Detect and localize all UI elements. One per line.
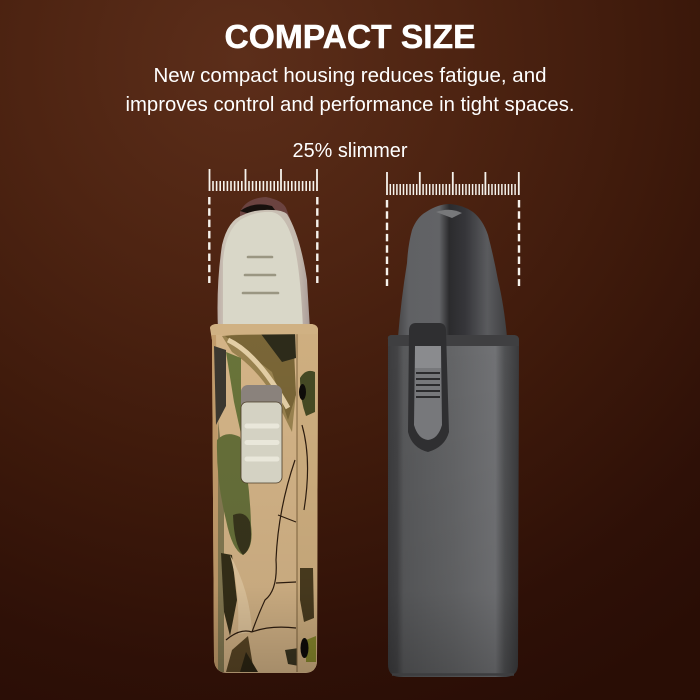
- upper leaf band: [222, 332, 296, 432]
- left ruler: [210, 169, 317, 191]
- description text: [126, 64, 574, 116]
- camo body rim: [210, 324, 318, 335]
- switch slot: [241, 385, 282, 425]
- lower dark leaves: [226, 636, 254, 672]
- left edge strip: [211, 335, 221, 672]
- dark cap: [398, 204, 507, 337]
- left device: camouflage trimmer: [208, 197, 320, 674]
- dashed guide lines: [209, 197, 519, 286]
- right ruler: [387, 172, 519, 195]
- label: 25% slimmer: 25% slimmer: [292, 140, 408, 162]
- light cap: [218, 210, 310, 330]
- right panel: [297, 332, 318, 672]
- green leaf: [217, 434, 252, 555]
- dark body: [388, 335, 519, 677]
- clip switch: [408, 323, 449, 452]
- description text: New compact housing reduces fatigue, and: [154, 64, 546, 87]
- leaf veins: [226, 425, 308, 640]
- description text: improves control and performance in tight spaces.: [126, 93, 574, 116]
- camo body: [208, 322, 320, 674]
- trimmer blade head: [240, 197, 292, 224]
- slide switch: [241, 402, 282, 483]
- title: COMPACT SIZE: [224, 18, 476, 55]
- right device: dark trimmer: [388, 204, 519, 677]
